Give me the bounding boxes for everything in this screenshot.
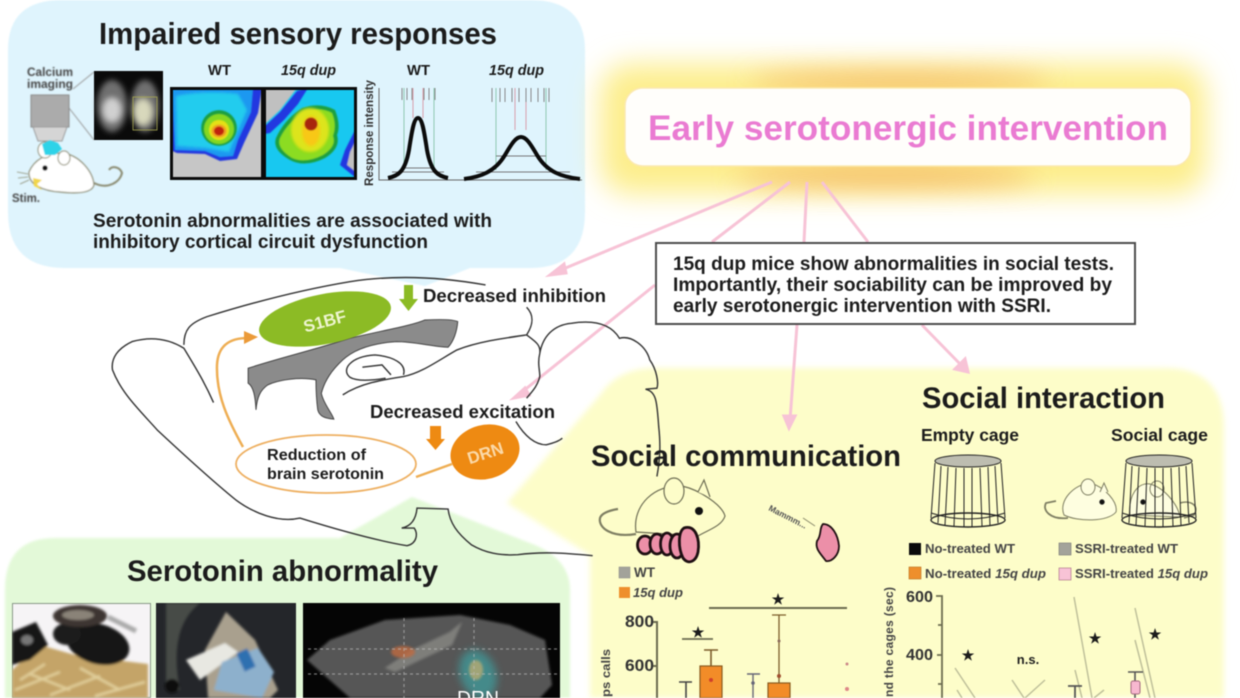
region: DRN: DRN (465, 439, 506, 468)
legend: social communication groups (619, 565, 683, 600)
image: calcium imaging of brain (94, 71, 163, 140)
text: serotonin abnormalities summary (93, 211, 492, 253)
significance marks: n.s. (1017, 652, 1039, 667)
diagram: sagittal brain (112, 278, 660, 556)
panel: serotonin abnormality (5, 497, 570, 698)
heading: social interaction: Social interaction (922, 383, 1165, 415)
bars and whiskers (679, 615, 849, 698)
y ticks (625, 613, 654, 675)
label: decreased excitation: Decreased excitation (370, 402, 555, 422)
y ticks (906, 589, 933, 664)
panel: social behaviour (507, 368, 1224, 698)
legend: social interaction groups: SSRI-treated WT (1075, 541, 1178, 556)
region: S1BF (254, 282, 396, 356)
legend: social interaction groups: SSRI-treated 15q dup (1075, 566, 1208, 581)
illustration: mouse pup calling (600, 478, 725, 562)
icon: calcium imaging microscope and mouse: imaging (27, 77, 73, 91)
brain outline (112, 278, 660, 556)
y ticks: 600 (625, 657, 654, 675)
region: DRN (444, 417, 526, 487)
whiskers and markers (1068, 672, 1143, 698)
text box: social tests summary: Importantly, their sociability can be improved by (673, 275, 1112, 296)
callout: reduction of brain serotonin: brain serotonin (267, 466, 384, 483)
significance marks: ★ (1149, 626, 1162, 642)
image: brain scan with DRN signal (303, 603, 560, 698)
text box: social tests summary (656, 243, 1135, 324)
gray callosum region (248, 320, 458, 419)
text box: social tests summary: early serotonergic intervention with SSRI. (673, 296, 1051, 317)
callout: reduction of brain serotonin: Reduction of (267, 447, 367, 464)
callout: reduction of brain serotonin (236, 435, 416, 493)
legend: social interaction groups: No-treated 15q dup (925, 566, 1046, 581)
significance stars (692, 591, 785, 640)
icon: empty cage (931, 455, 1005, 527)
icon: calcium imaging microscope and mouse: Stim. (12, 193, 40, 205)
text: serotonin abnormalities summary: inhibitory cortical circuit dysfunction (93, 232, 428, 253)
heading: impaired sensory responses: Impaired sensory responses (99, 17, 497, 51)
significance marks (962, 626, 1162, 667)
label: WT map: WT (208, 63, 231, 79)
heading: social communication: Social communication (591, 441, 901, 473)
label: empty cage: Empty cage (921, 425, 1019, 445)
chart: response curves (379, 88, 582, 180)
callout: early serotonergic intervention (625, 88, 1191, 166)
callout: early serotonergic intervention: Early serotonergic intervention (648, 109, 1168, 148)
icon: calcium imaging microscope and mouse (12, 65, 122, 205)
icon: social cage with mice (1045, 455, 1196, 527)
significance marks: ★ (962, 647, 975, 663)
pathway: serotonin to S1BF (217, 331, 258, 447)
axis label: response intensity: Response intensity (364, 79, 376, 186)
text box: social tests summary: 15q dup mice show abnormalities in social tests. (673, 254, 1114, 275)
label: 15q dup curve: 15q dup (489, 63, 544, 79)
chart: time around the cages (882, 587, 1162, 698)
label: decreased inhibition: Decreased inhibition (423, 286, 606, 306)
arrow: decreased excitation (426, 426, 445, 450)
illustration: isolated pup with vocalisation (767, 503, 839, 561)
pathway: DRN link (416, 464, 452, 477)
significance marks: ★ (1089, 630, 1102, 646)
label: WT curve: WT (407, 63, 430, 79)
arrow: decreased inhibition (399, 285, 418, 311)
axis label: pups calls: ps calls (599, 649, 613, 697)
photo: imaging apparatus (156, 603, 296, 698)
legend: social communication groups: WT (634, 565, 656, 580)
label: 15q dup map: 15q dup (281, 63, 336, 79)
chart: pups calls (599, 591, 849, 698)
y ticks: 800 (625, 613, 654, 631)
y ticks: 600 (906, 589, 933, 606)
glow: intervention halo (600, 64, 1206, 194)
panel: impaired sensory responses (8, 0, 585, 286)
region: S1BF: S1BF (301, 307, 348, 336)
heading: serotonin abnormality: Serotonin abnormality (127, 555, 439, 588)
y ticks: 400 (906, 647, 933, 664)
legend: social interaction groups (909, 541, 1208, 581)
arrows: pink intervention arrows (514, 182, 968, 428)
illustration: isolated pup with vocalisation: Mammm... (767, 503, 809, 531)
axis label: time around cages: nd the cages (sec) (882, 587, 896, 697)
legend: social interaction groups: No-treated WT (925, 541, 1015, 556)
significance stars: ★ (692, 624, 705, 640)
icon: pink pups (638, 527, 698, 562)
photo: mice on bedding (12, 603, 151, 698)
text: serotonin abnormalities summary: Serotonin abnormalities are associated with (93, 211, 492, 232)
heatmaps: WT and 15q dup (170, 87, 357, 180)
legend: social communication groups: 15q dup (633, 585, 683, 600)
label: social cage: Social cage (1111, 425, 1208, 445)
significance stars: ★ (772, 591, 785, 607)
icon: calcium imaging microscope and mouse: Calcium (27, 65, 73, 79)
data lines (955, 597, 1155, 698)
